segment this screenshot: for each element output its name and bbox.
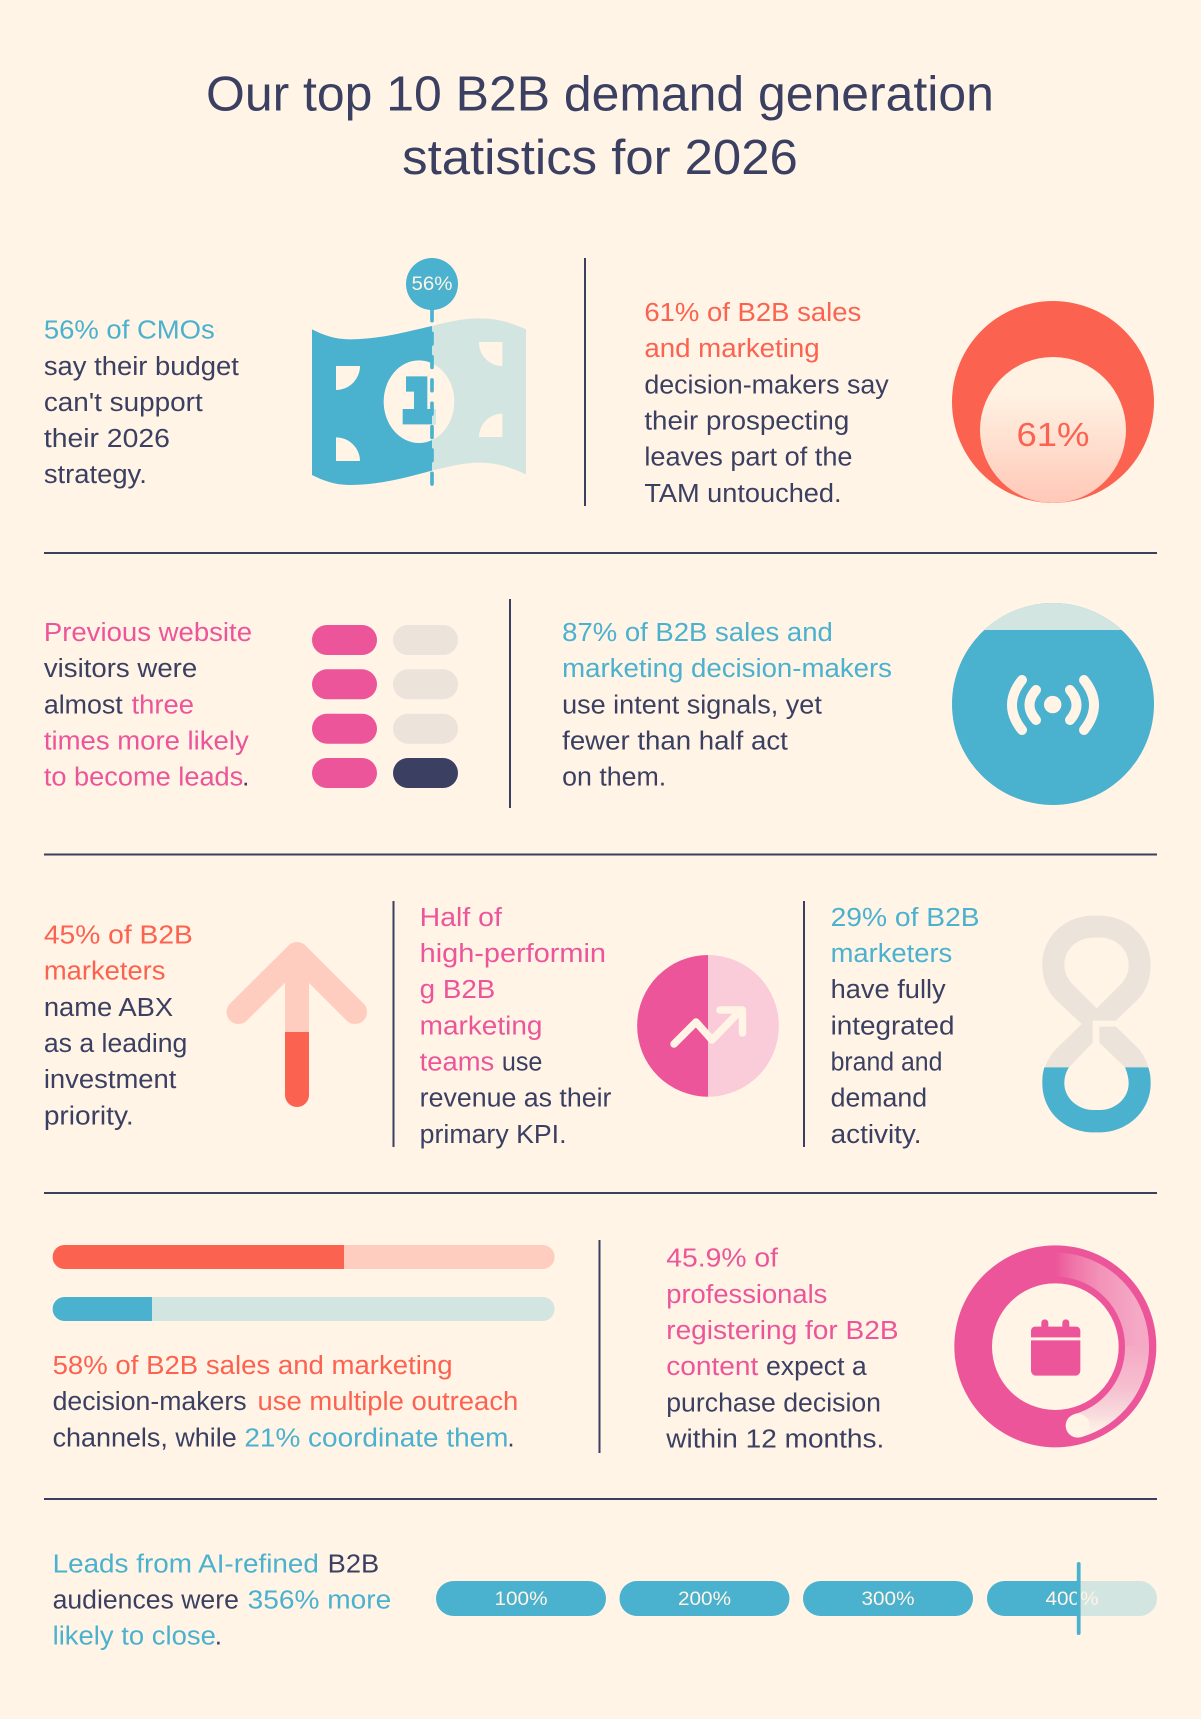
text: 61% of B2B sales: and marketing (644, 333, 820, 363)
text: previous website visitors: three (131, 689, 194, 719)
text: half of high-performing (420, 902, 612, 1149)
text: half of high-performing: primary KPI. (420, 1119, 567, 1149)
text: 29% of B2B marketers: 29% of B2B (831, 902, 980, 932)
text: 29% of B2B marketers (831, 902, 980, 1149)
chart: percentage pills: 400% (1046, 1589, 1099, 1610)
text: 56% of CMOs: strategy. (44, 459, 147, 489)
text: leads from AI-refined: audiences were (53, 1585, 239, 1615)
text: previous website visitors: . (242, 762, 249, 792)
text: leads from AI-refined: 356% more (248, 1585, 391, 1615)
icon: dollar bill with 56% marker: 56% (412, 274, 453, 295)
text: 29% of B2B marketers: brand and (831, 1047, 942, 1077)
text: leads from AI-refined: likely to close (53, 1621, 216, 1651)
text: 58% of B2B sales: . (507, 1422, 515, 1452)
text: 56% of CMOs (44, 315, 240, 489)
text: 45.9% of professionals: professionals (666, 1279, 827, 1309)
text: 58% of B2B sales: channels, while (53, 1422, 237, 1452)
text: previous website visitors: almost (44, 689, 124, 719)
text: 87% of B2B sales: on them. (562, 762, 666, 792)
text: leads from AI-refined: Leads from AI-refined (53, 1548, 319, 1578)
text: 58% of B2B sales: 21% coordinate them (244, 1422, 508, 1452)
text: leads from AI-refined: . (215, 1621, 222, 1651)
icon: dollar bill with 56% marker (312, 258, 526, 488)
text: half of high-performing: teams (420, 1047, 494, 1077)
icon: hourglass (1042, 916, 1151, 1132)
text: 45.9% of professionals (665, 1243, 899, 1453)
text: 61% of B2B sales: decision-makers say (644, 369, 889, 399)
text: 56% of CMOs: say their budget (44, 351, 240, 381)
text: half of high-performing: use (502, 1047, 542, 1077)
text: 29% of B2B marketers: integrated (831, 1010, 954, 1040)
icon: trend pie (637, 955, 779, 1097)
text: half of high-performing: high-performin (420, 938, 606, 968)
text: 87% of B2B sales: use intent signals, yet (562, 689, 823, 719)
text: previous website visitors (44, 617, 252, 792)
chart: percentage pills: 100% (494, 1589, 548, 1610)
text: 45.9% of professionals: registering for B2B (666, 1315, 899, 1345)
text: half of high-performing: g B2B (420, 974, 495, 1004)
text: half of high-performing: revenue as their (420, 1083, 612, 1113)
icon: 61% circle: 61% (1016, 416, 1090, 453)
text: 58% of B2B sales: 58% of B2B sales and marketing (53, 1350, 453, 1380)
chart: progress bars (53, 1245, 555, 1321)
text: 61% of B2B sales: TAM untouched. (644, 478, 842, 508)
text: 58% of B2B sales: use multiple outreach (258, 1386, 518, 1416)
chart: percentage pills: 200% (678, 1589, 731, 1610)
text: 45% of B2B marketers: 45% of B2B (44, 919, 193, 949)
chart: percentage pills: 300% (862, 1589, 915, 1610)
text: previous website visitors: visitors were (44, 653, 197, 683)
text: 61% of B2B sales: leaves part of the (644, 442, 853, 472)
chart: percentage pills (436, 1562, 1157, 1635)
text: 29% of B2B marketers: activity. (831, 1119, 922, 1149)
text: 45.9% of professionals: purchase decision (666, 1387, 881, 1417)
text: 56% of CMOs: can't support (44, 387, 204, 417)
text: 87% of B2B sales (562, 617, 892, 792)
text: 45.9% of professionals: content (666, 1351, 759, 1381)
text: previous website visitors: times more likely (44, 726, 249, 756)
text: 45.9% of professionals: expect a (766, 1351, 867, 1381)
text: leads from AI-refined (53, 1548, 391, 1651)
text: 56% of CMOs: their 2026 (44, 423, 170, 453)
text: 87% of B2B sales: marketing decision-makers (562, 653, 892, 683)
text: 45% of B2B marketers: marketers (44, 956, 165, 986)
title: Our top 10 B2B demand generation (206, 67, 994, 122)
text: 45% of B2B marketers (44, 919, 193, 1130)
text: 87% of B2B sales: fewer than half act (562, 726, 789, 756)
title (206, 67, 994, 185)
text: 29% of B2B marketers: demand (831, 1083, 927, 1113)
title: statistics for 2026 (402, 130, 798, 185)
icon: calendar ring (954, 1245, 1156, 1447)
text: 58% of B2B sales: decision-makers (53, 1386, 247, 1416)
text: half of high-performing: Half of (420, 902, 503, 932)
text: 61% of B2B sales: their prospecting (644, 406, 849, 436)
text: 45% of B2B marketers: investment (44, 1064, 177, 1094)
icon: signal circle (950, 600, 1156, 805)
text: 45.9% of professionals: 45.9% of (666, 1243, 779, 1273)
text: leads from AI-refined: B2B (328, 1548, 379, 1578)
text: 45% of B2B marketers: name ABX (44, 992, 173, 1022)
text: 87% of B2B sales: 87% of B2B sales and (562, 617, 833, 647)
text: 58% of B2B sales (53, 1350, 518, 1452)
text: 61% of B2B sales: 61% of B2B sales (644, 297, 861, 327)
text: 45% of B2B marketers: as a leading (44, 1028, 187, 1058)
chart: pill pairs (312, 625, 458, 788)
text: 29% of B2B marketers: marketers (831, 938, 952, 968)
text: 45.9% of professionals: within 12 months. (665, 1423, 884, 1453)
text: 45% of B2B marketers: priority. (44, 1100, 134, 1130)
text: previous website visitors: to become leads (44, 762, 243, 792)
text: 61% of B2B sales (644, 297, 889, 508)
text: 56% of CMOs: 56% of CMOs (44, 315, 215, 345)
text: 29% of B2B marketers: have fully (831, 974, 946, 1004)
text: previous website visitors: Previous website (44, 617, 252, 647)
text: half of high-performing: marketing (420, 1010, 542, 1040)
icon: up arrow (238, 954, 355, 1107)
icon: 61% circle (952, 301, 1154, 503)
